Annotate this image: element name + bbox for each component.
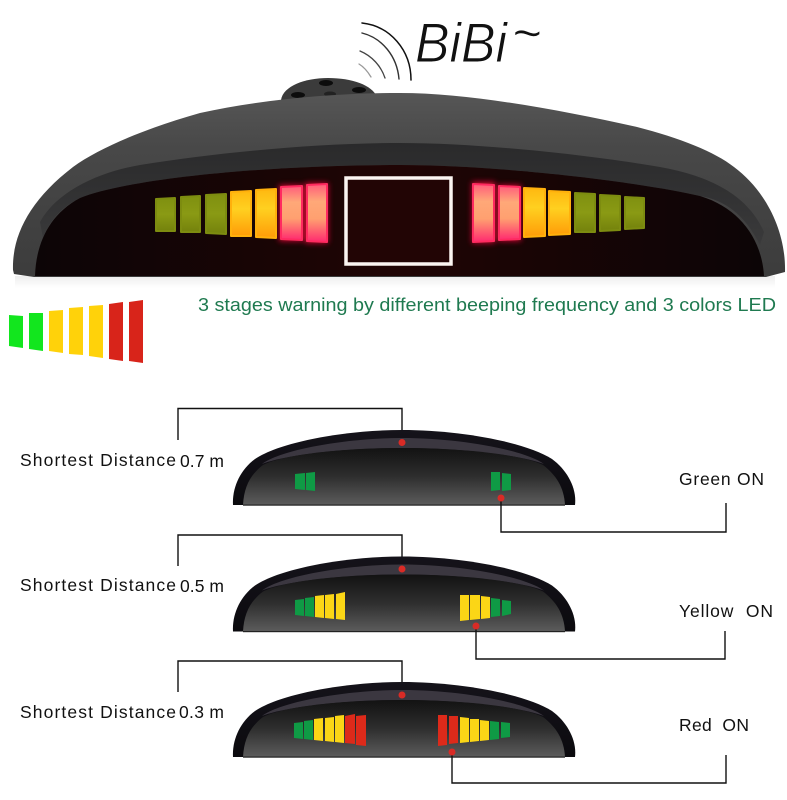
small display unit: [233, 556, 575, 632]
LEDs: left: [294, 714, 366, 746]
sensor dots and leader: [398, 439, 726, 532]
display screen: [35, 165, 764, 276]
bracket line: distance: [178, 408, 402, 440]
main display unit: [13, 78, 785, 288]
caption: 3 stages warning: 3 stages warning by different beeping frequency and 3 colors LED: [198, 295, 776, 315]
stage 3: red: [20, 661, 749, 783]
LEDs: right: [438, 715, 510, 746]
LEDs: right: [460, 595, 511, 621]
floor shadow: [15, 276, 775, 288]
color legend bars: [9, 300, 143, 363]
label: shortest distance 0.5 m: 0.5 m: [180, 576, 224, 596]
sensor mount: [281, 78, 377, 100]
label: shortest distance 0.7 m: Shortest Distance: [20, 450, 176, 470]
label: shortest distance 0.5 m: Shortest Distance: [20, 575, 176, 595]
title: BiBi~: BiBi: [415, 11, 508, 74]
icon: sound waves: [359, 23, 411, 80]
bracket line: distance: [178, 535, 402, 566]
small display unit: [233, 682, 575, 758]
label: red on: Red ON: [679, 715, 749, 735]
label: shortest distance 0.7 m: 0.7 m: [180, 451, 224, 471]
title: BiBi~: ~: [512, 5, 541, 61]
bracket line: distance: [178, 661, 402, 692]
display housing: [13, 93, 785, 277]
right LED bar: [472, 182, 644, 243]
label: green on: Green ON: [679, 469, 764, 489]
label: shortest distance 0.3 m: Shortest Distance: [20, 702, 176, 722]
stage 1: green: [20, 408, 764, 532]
stage 2: yellow: [20, 535, 773, 659]
LEDs: left: [295, 592, 345, 620]
left LED bar: [156, 183, 328, 243]
sensor dots and leader: [398, 566, 725, 659]
small display unit: [233, 430, 575, 506]
label: shortest distance 0.3 m: 0.3 m: [179, 702, 224, 722]
LEDs: green right: [491, 472, 511, 491]
sensor dots and leader: [398, 692, 726, 783]
housing dark band: [40, 143, 764, 245]
LEDs: green left: [295, 472, 315, 491]
center display frame: [346, 178, 451, 264]
label: yellow on: Yellow ON: [679, 601, 773, 621]
